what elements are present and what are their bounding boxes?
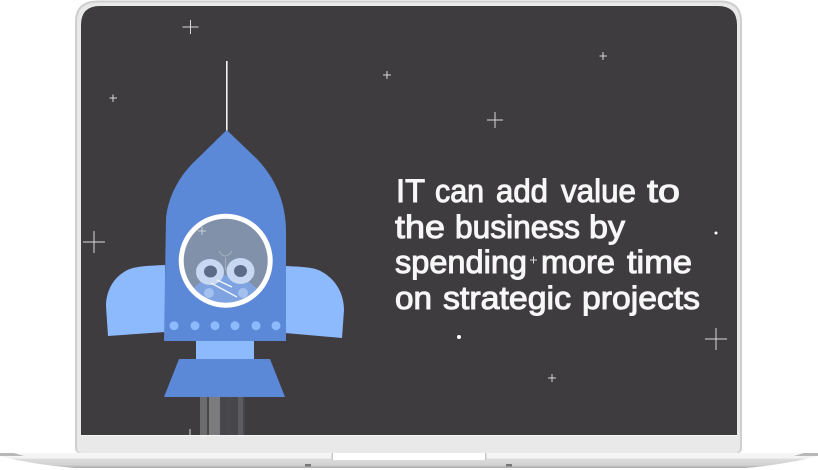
right wing [285,266,344,338]
screen [81,6,737,436]
headline: strategic [443,280,571,316]
headline: more [541,244,615,280]
headline: to [647,173,680,209]
left wing [106,265,165,336]
stars [83,20,727,435]
window [178,214,273,308]
headline [395,173,700,316]
headline: value [561,173,636,209]
window rocket body [194,275,256,303]
headline: time [627,244,692,280]
window antenna [219,251,232,270]
headline: spending [395,244,527,280]
window star [198,227,206,235]
laptop base [0,453,818,468]
headline: on [395,280,432,316]
headline: projects [582,280,700,316]
rocket [106,61,344,435]
headline: by [589,209,625,245]
goggle eyes [196,258,254,285]
headline: the [395,209,445,245]
headline: can [435,173,484,209]
headline: business [455,209,580,245]
hinge feet [305,464,311,466]
window streaks [211,280,237,297]
headline: IT [396,173,425,209]
laptop lid [75,0,742,453]
trackpad notch [333,453,485,460]
headline: add [496,173,548,209]
rocket exhaust [200,397,245,435]
porthole row [170,321,280,330]
rocket body [164,130,286,341]
neck [196,340,254,360]
antenna [226,61,228,131]
engine base [164,359,285,397]
